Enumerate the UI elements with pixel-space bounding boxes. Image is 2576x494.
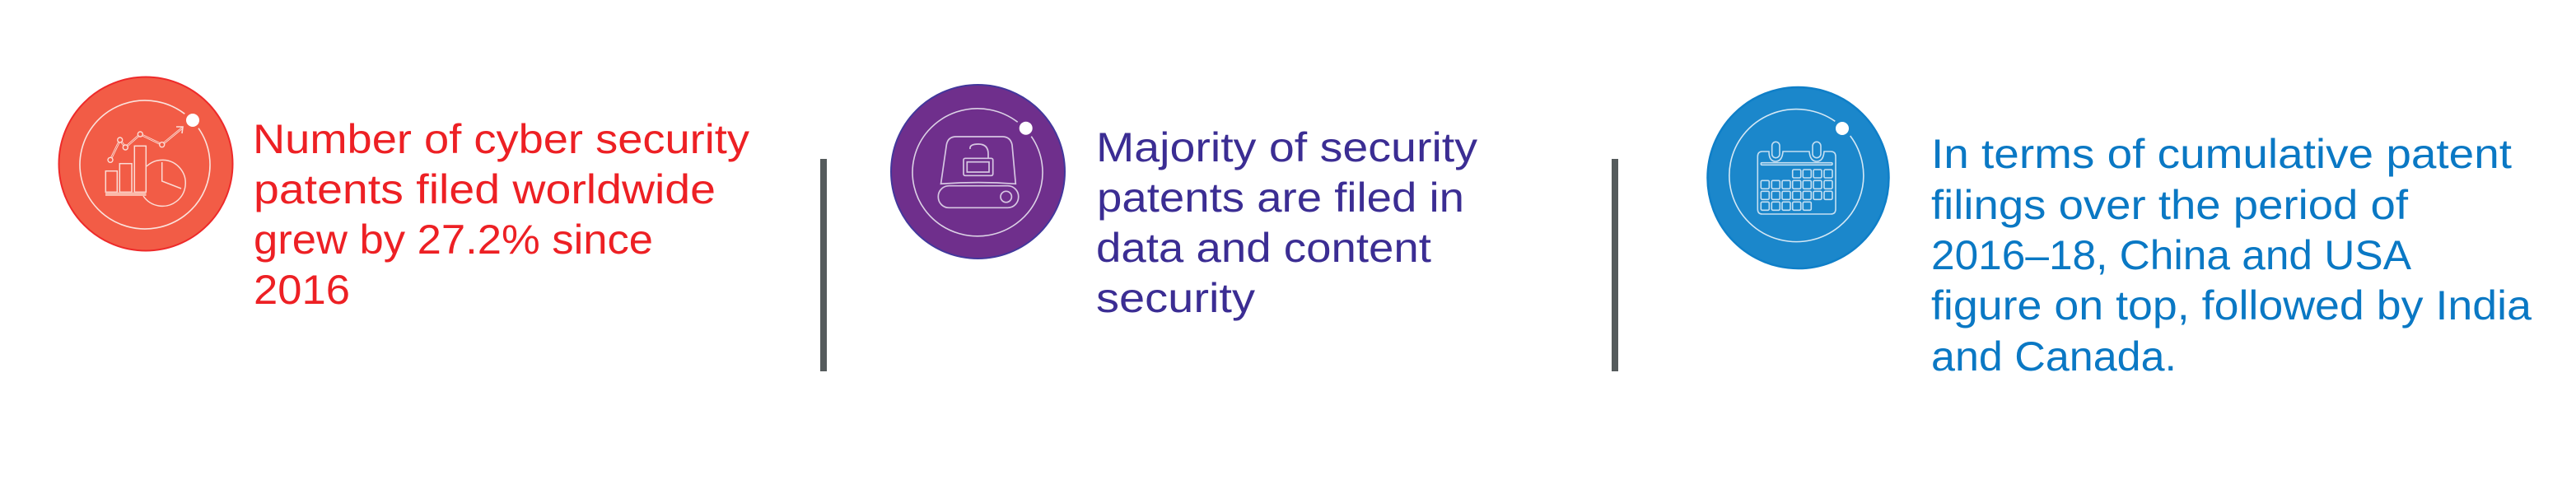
text: patents growth: 2016 — [254, 267, 350, 313]
text: patents growth: grew by 27.2% since — [254, 217, 653, 263]
text: patents growth: patents filed worldwide — [254, 166, 716, 212]
panel: cumulative filings — [1708, 87, 2532, 380]
text: cumulative filings: and Canada. — [1931, 333, 2177, 380]
text: data and content security: security — [1096, 275, 1255, 321]
text: cumulative filings: In terms of cumulative patent — [1931, 131, 2512, 177]
text: data and content security: Majority of security — [1096, 124, 1477, 170]
icon: unlocked drive badge — [891, 85, 1065, 259]
text: data and content security: patents are filed in — [1097, 175, 1464, 221]
icon: charts badge — [59, 77, 232, 250]
text: cumulative filings: figure on top, followed by India — [1931, 282, 2532, 329]
icon: calendar badge — [1708, 87, 1889, 268]
text: data and content security: data and content — [1096, 225, 1431, 271]
text: patents growth: Number of cyber security — [253, 116, 749, 162]
text: data and content security — [1096, 124, 1477, 321]
divider 2 — [1612, 159, 1618, 371]
text: cumulative filings — [1931, 131, 2532, 380]
panel: patents growth — [59, 77, 749, 313]
divider 1 — [820, 159, 827, 371]
text: cumulative filings: filings over the period of — [1931, 182, 2408, 228]
text: patents growth — [253, 116, 749, 313]
panel: data and content security — [891, 85, 1477, 321]
text: cumulative filings: 2016–18, China and USA — [1931, 232, 2412, 278]
